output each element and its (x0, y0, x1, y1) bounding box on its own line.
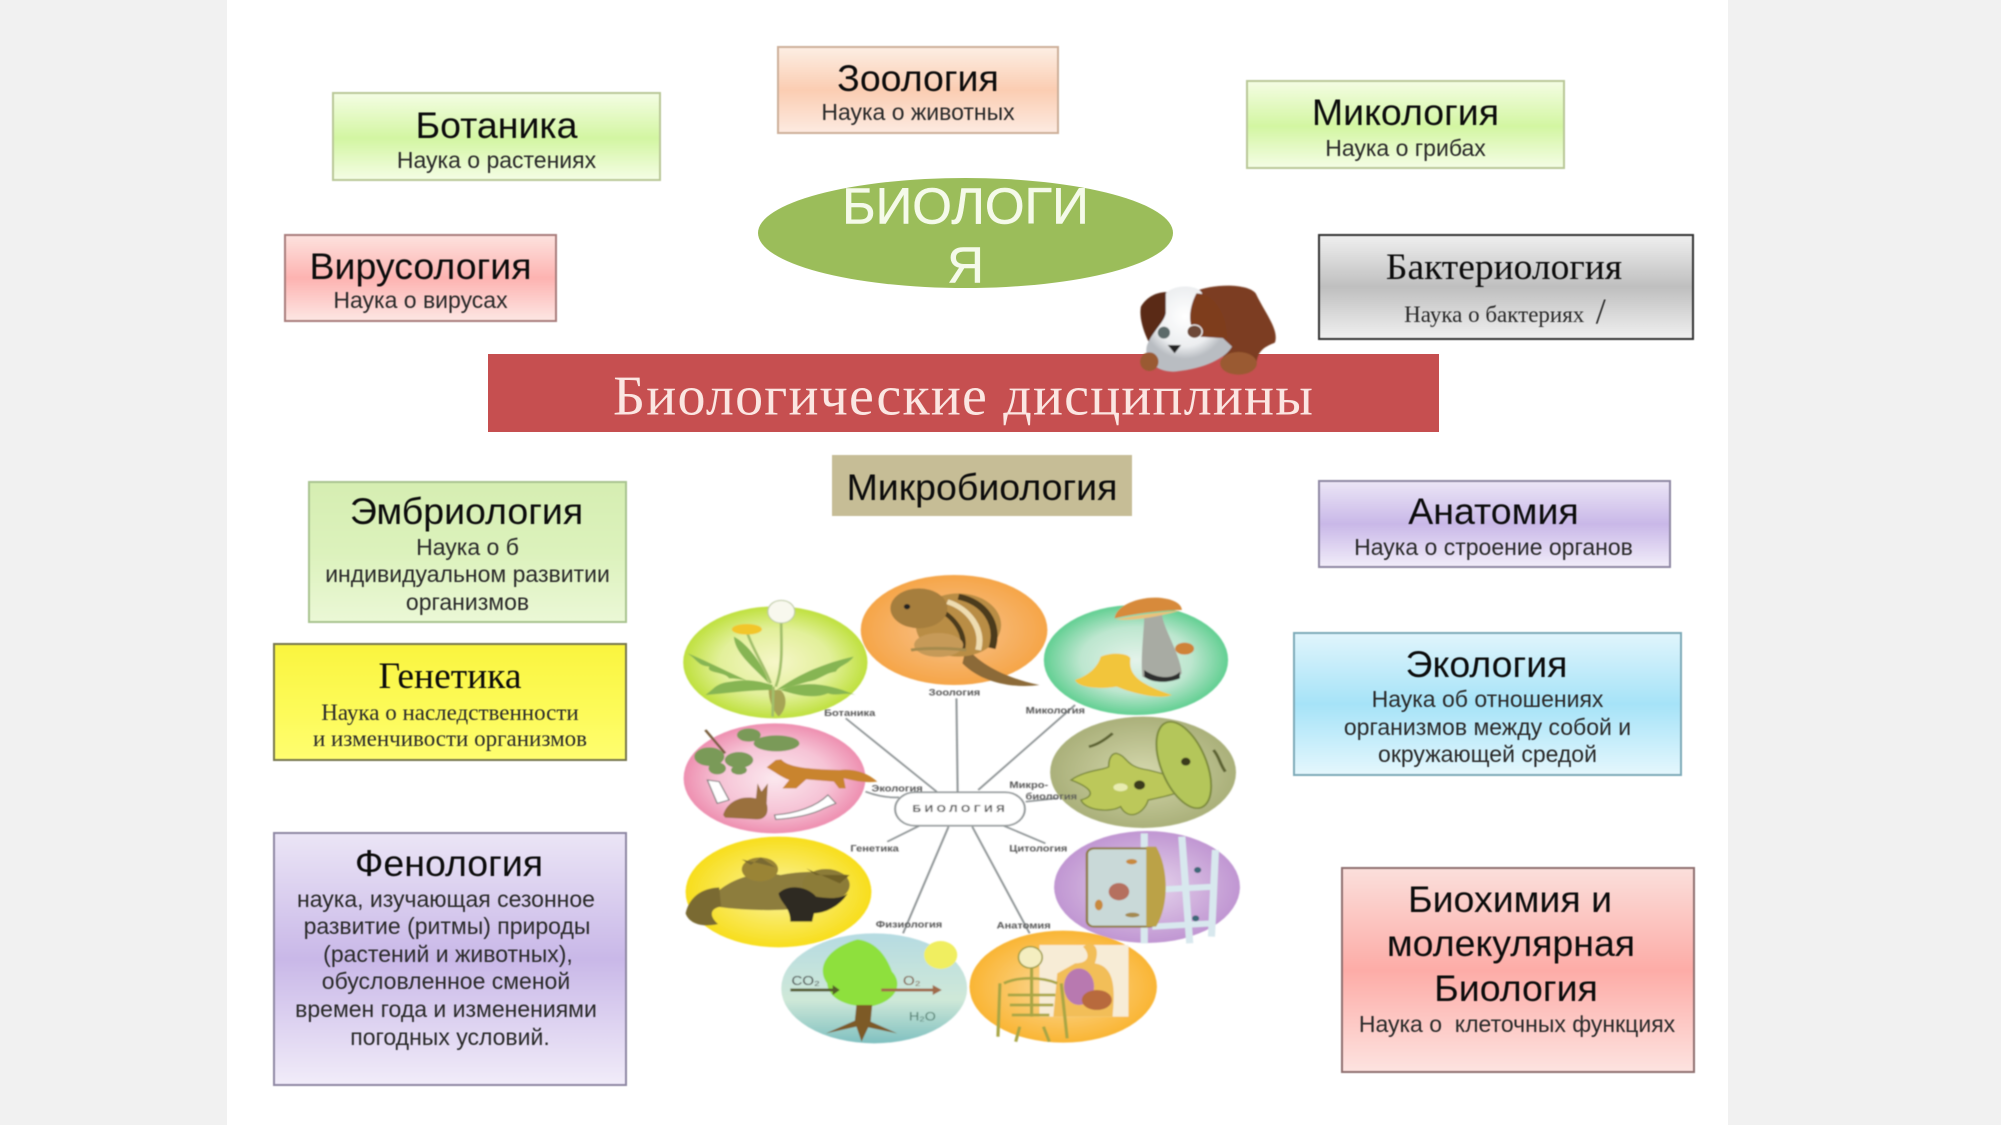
box: Биохимия (1341, 867, 1695, 1073)
circle: ecology fox and hare (684, 723, 877, 833)
box: Микология (1246, 80, 1565, 169)
label: Зоология: Зоология (929, 688, 980, 698)
banner title: Биологические дисциплины (613, 366, 1314, 428)
heading: Биохимия и (1408, 878, 1612, 920)
heading: Микробиология (847, 466, 1117, 508)
description: организмов между собой и (1344, 714, 1631, 740)
box: Зоология (777, 46, 1059, 134)
box: Вирусология (284, 234, 557, 322)
heading: Анатомия (1408, 490, 1579, 532)
title banner (488, 354, 1439, 432)
circle: cytology cell (1054, 831, 1240, 943)
description: (растений и животных), (323, 941, 573, 967)
label: Ботаника: Ботаника (824, 709, 876, 719)
heading: Фенология (355, 842, 543, 884)
box: Микробиология (832, 455, 1132, 516)
box: Эмбриология (308, 481, 627, 623)
description: Наука о бактериях / (1404, 291, 1606, 331)
description: Наука о животных (821, 99, 1015, 125)
ellipse text line 1: БИОЛОГИ (842, 177, 1089, 234)
circle: microbiology amoeba (1050, 716, 1236, 828)
label: Цитология: Цитология (1009, 844, 1067, 854)
description: организмов (406, 589, 529, 615)
description: Наука о вирусах (333, 287, 508, 313)
heading: молекулярная (1387, 922, 1635, 964)
description: индивидуальном развитии (325, 561, 610, 587)
illustration: biology branches wheel (682, 574, 1241, 1044)
heading: Вирусология (309, 245, 532, 287)
box: Ботаника (332, 92, 661, 181)
white slide area (227, 0, 1728, 1125)
label: Микро-: Микро- (1009, 781, 1048, 791)
description: Наука о наследственности (321, 700, 579, 725)
branch lines (846, 698, 1075, 933)
ellipse text line 2: Я (947, 236, 984, 293)
circle: genetics cats (686, 837, 871, 947)
heading: Бактериология (1386, 247, 1622, 288)
heading: Генетика (379, 656, 521, 697)
description: Наука о растениях (397, 147, 596, 173)
heading: Эмбриология (350, 490, 583, 532)
heading: Ботаника (416, 104, 578, 146)
ellipse: Биология (758, 178, 1173, 288)
box: Бактериология (1318, 234, 1694, 340)
label: Физиология: Физиология (876, 920, 942, 930)
box: Экология (1293, 632, 1682, 776)
label: Микология: Микология (1026, 706, 1085, 716)
label: биология: биология (1026, 791, 1077, 802)
circle: anatomy skeleton (969, 931, 1157, 1043)
box: Анатомия (1318, 480, 1671, 568)
description: Наука о клеточных функциях (1359, 1011, 1675, 1037)
description: обусловленное сменой (322, 968, 570, 994)
circle: botany dandelion (683, 600, 867, 718)
label: Анатомия: Анатомия (997, 921, 1051, 931)
heading: Экология (1406, 643, 1567, 685)
circle: physiology tree: O₂ (903, 973, 921, 988)
description: погодных условий. (350, 1024, 550, 1050)
label: Генетика: Генетика (850, 844, 899, 854)
heading: Зоология (837, 57, 999, 99)
box: Генетика (273, 643, 627, 761)
description: времен года и изменениями (295, 996, 597, 1022)
description: Наука о грибах (1325, 135, 1486, 161)
circle: physiology tree (781, 933, 967, 1043)
description: Наука об отношениях (1372, 686, 1603, 712)
icon: puppy (1139, 284, 1277, 375)
circle: zoology chipmunk (861, 575, 1047, 686)
circle: physiology tree: H₂O (909, 1010, 936, 1023)
description: развитие (ритмы) природы (304, 913, 590, 939)
centre node: Биология: БИОЛОГИЯ (913, 804, 1008, 815)
heading: Микология (1312, 91, 1499, 133)
circle: mycology mushrooms (1044, 598, 1228, 715)
heading: Биология (1434, 967, 1598, 1009)
description: Наука о строение органов (1354, 534, 1633, 560)
box: Фенология (273, 832, 627, 1086)
description: окружающей средой (1378, 741, 1597, 767)
centre node: Биология (895, 792, 1025, 826)
description: наука, изучающая сезонное (297, 886, 595, 912)
label: Экология: Экология (872, 784, 923, 794)
description: Наука о б (416, 534, 519, 560)
circle: physiology tree: CO₂ (792, 973, 820, 988)
description: и изменчивости организмов (313, 726, 587, 751)
